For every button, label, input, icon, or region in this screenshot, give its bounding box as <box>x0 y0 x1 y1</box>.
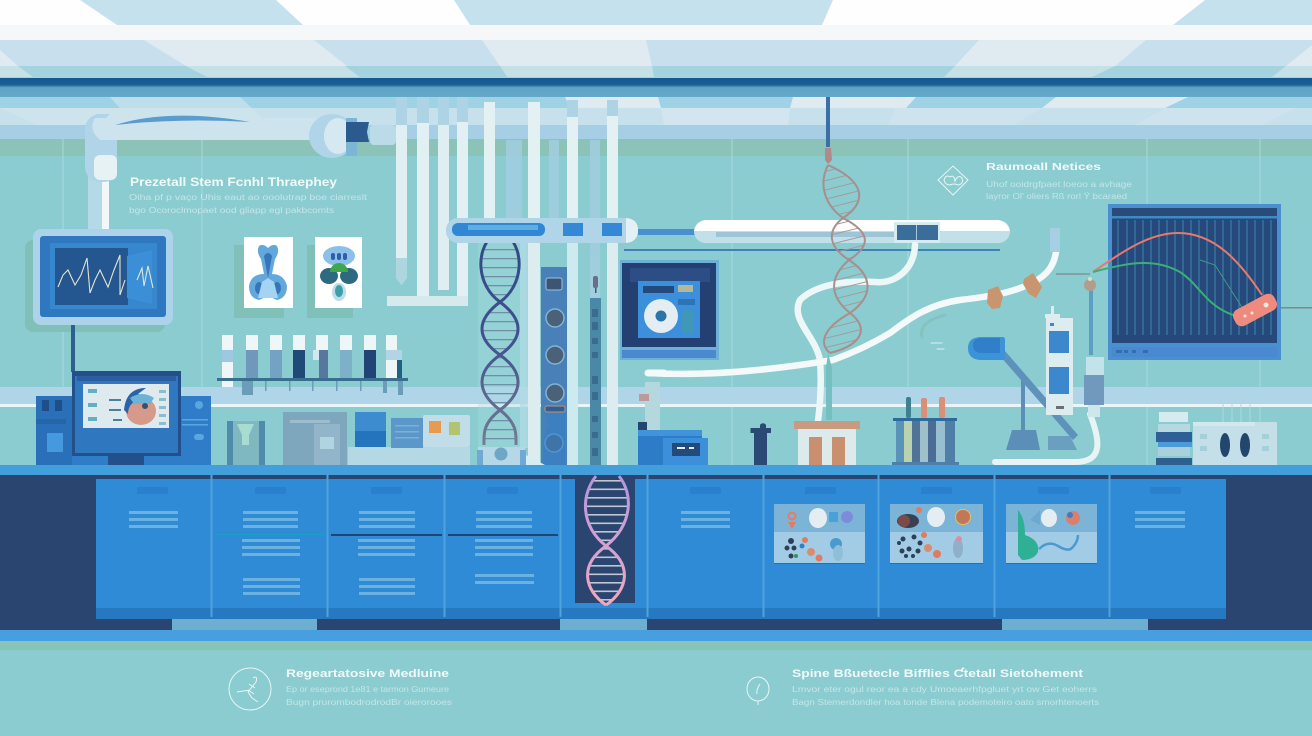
icon: balloon marker <box>747 677 769 705</box>
cabinet chart card 2 <box>890 504 983 564</box>
ceiling duct band <box>0 78 1312 97</box>
caption: spine stem cell treatment <box>792 668 1099 707</box>
DNA helix: cabinet panel <box>575 475 635 605</box>
caption: spine stem cell treatment: Lmvor eter ogul reor ea a cdy Umoeaerhfpgluet yrt ow Get eoherrs <box>792 685 1097 694</box>
cabinet chart card 3 <box>1006 504 1097 564</box>
heading: right notices note <box>986 161 1133 201</box>
heading: right notices note: Raumoall Netices <box>986 161 1101 173</box>
white capsule pipe <box>694 220 1010 251</box>
wall control panel <box>1045 306 1073 415</box>
overhead arm <box>85 114 396 230</box>
heading: left therapy note: Oiha pf p vaço Uhis eaut ao ooolutrap boe ciarreslt <box>129 193 368 202</box>
caption: regenerative medicine <box>286 668 452 707</box>
wall display with disc <box>620 260 719 360</box>
caption: regenerative medicine: Regeartatosive Medluine <box>286 668 449 680</box>
heading: right notices note: Uhof ooidrgfpaet loeoo a avhage <box>986 180 1133 189</box>
syringe and drain tube <box>995 277 1104 462</box>
flexible white tubing <box>648 245 1056 421</box>
books and analyser <box>1156 396 1277 465</box>
graph monitor <box>1056 204 1312 360</box>
cabinet row <box>96 475 1226 619</box>
poster: anatomy illustration 1 <box>234 237 293 318</box>
heading: left therapy note <box>129 175 368 215</box>
icon: regenerative medicine circle <box>229 668 271 710</box>
caption: regenerative medicine: Bugn prurombodrodrodBr oierorooes <box>286 698 452 707</box>
narrow rack and probe <box>590 276 601 465</box>
instrument column with dials <box>541 267 567 465</box>
heading: left therapy note: bgo Ocoroclmopaet ood gliapp egl pakbcomts <box>129 206 334 215</box>
poster: anatomy illustration 2 <box>307 237 362 318</box>
counter and cabinet base <box>0 465 1312 736</box>
cabinet chart card 1 <box>774 504 865 564</box>
pipe clamps <box>987 228 1060 309</box>
ceiling <box>0 0 1312 78</box>
pedestal with orange panels <box>794 421 860 465</box>
dark bottle <box>750 423 771 465</box>
caption: regenerative medicine: Ep or eseprond 1e81 e tarmon Gumeure <box>286 685 450 694</box>
heading: left therapy note: Prezetall Stem Fcnhl Thraephey <box>130 175 337 189</box>
connector bar with blue modules <box>446 218 1000 251</box>
lamp on arm <box>968 337 1078 450</box>
printer unit on bench <box>638 382 708 465</box>
caption: spine stem cell treatment: Spine Bßuetecle Bifflies Ƈtetall Sietohement <box>792 668 1083 680</box>
vertical pipes <box>387 97 618 465</box>
desktop computer station <box>36 371 211 465</box>
icon: hexagon with cell <box>938 166 968 195</box>
sample tube stand <box>892 397 959 465</box>
lower ceiling panels <box>0 97 1312 139</box>
caption: spine stem cell treatment: Bagn Stemerdondler hoa tonde Blena podemoteiro oato smorhtenoerts <box>792 698 1099 707</box>
heading: right notices note: layror Ol' oliers Rß rorl Ÿ bcaraed <box>986 192 1127 201</box>
lab bench equipment <box>227 412 470 465</box>
test tube rack <box>217 335 408 395</box>
DNA helix: hanging rose <box>823 97 868 420</box>
wall monitor with waveform <box>25 229 173 372</box>
DNA helix: tall navy <box>477 236 545 465</box>
wall <box>0 139 1312 465</box>
